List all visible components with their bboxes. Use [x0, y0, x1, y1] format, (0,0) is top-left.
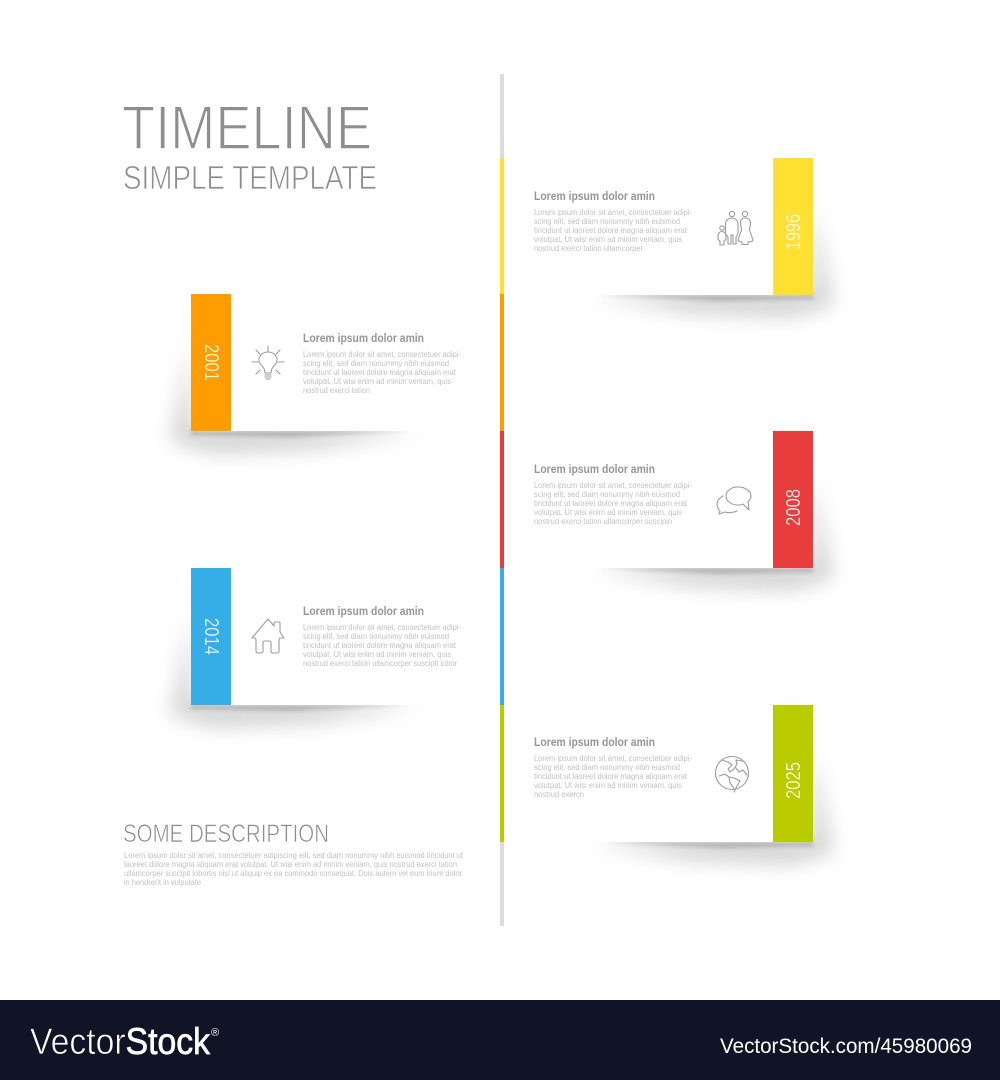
card: 2001: volutpat. Ut wisi enim ad minim veniam, quis: [303, 377, 451, 386]
description block: Lorem ipsum dolor sit amet, consectetuer adipiscing elit, sed diam nonummy nibh euismod tincidunt ut: [124, 851, 464, 860]
title: [122, 94, 377, 196]
card: 2008: Lorem ipsum dolor amin: [534, 462, 655, 476]
description block: laoreet dolore magna aliquam erat volutpat. Ut wisi enim ad minim veniam, quis nostrud exerci tation: [124, 860, 457, 869]
card: 2025: [520, 705, 832, 863]
card: 2014: Lorem ipsum dolor sit amet, consectetuer adipi-: [303, 623, 461, 632]
card: 1996: nostrud exerci tation ullamcorper: [534, 244, 643, 253]
footer url: VectorStock.com/45980069: [720, 1035, 972, 1058]
icon: speech bubbles: [717, 487, 751, 514]
card: 2008: [520, 431, 832, 589]
icon: house: [252, 619, 284, 653]
card: 2008: tincidunt ut laoreet dolore magna aliquam erat: [534, 499, 688, 508]
card: 2001: Lorem ipsum dolor amin: [303, 331, 424, 345]
card: 2014: 2014: [200, 618, 222, 655]
card: 2025: nostrud exercn: [534, 790, 584, 799]
card: 2014: tincidunt ut laoreet dolore magna aliquam erat: [303, 641, 457, 650]
card: 1996: [520, 158, 832, 316]
description block: [123, 820, 464, 887]
footer bar: [0, 1000, 1000, 1080]
card: 1996: Lorem ipsum dolor amin: [534, 189, 655, 203]
title: SIMPLE TEMPLATE: [123, 159, 377, 196]
icon: globe: [716, 756, 748, 792]
description block: ullamcorper suscipit lobortis nisl ut aliquip ex ea commodo consequat. Duis autem vel eum iriure dolor: [124, 869, 462, 878]
card: 2025: tincidunt ut laoreet dolore magna aliquam erat: [534, 772, 688, 781]
registered mark: ®: [211, 1027, 219, 1039]
card: 1996: Lorem ipsum dolor sit amet, consectetuer adipi-: [534, 208, 692, 217]
card: 2008: 2008: [783, 489, 805, 526]
timeline axis: [500, 74, 504, 926]
card: 2008: scing elit, sed diam nonummy nibh euismod: [534, 490, 680, 499]
card: 2025: volutpat. Ut wisi enim ad minim veniam, quis: [534, 781, 682, 790]
card: 2025: scing elit, sed diam nonummy nibh euismod: [534, 763, 680, 772]
card: 2001: nostrud exerci tation: [303, 386, 370, 395]
card: 2008: nostrud exerci tation ullamcorper suscipin: [534, 517, 672, 526]
card: 1996: tincidunt ut laoreet dolore magna aliquam erat: [534, 226, 688, 235]
title: TIMELINE: [122, 94, 372, 163]
icon: light bulb: [252, 346, 284, 379]
card: 1996: scing elit, sed diam nonummy nibh euismod: [534, 217, 680, 226]
card: 2001: scing elit, sed diam nonummy nibh euismod: [303, 359, 449, 368]
card: 2014: [172, 568, 486, 726]
card: 2014: nostrud exerci tation ullamcorper suscipit lobor: [303, 659, 457, 668]
card: 2025: 2025: [783, 762, 805, 799]
card: 2008: volutpat. Ut wisi enim ad minim veniam, quis: [534, 508, 682, 517]
card: 2001: tincidunt ut laoreet dolore magna aliquam erat: [303, 368, 457, 377]
icon: family: [718, 211, 753, 245]
card: 2008: Lorem ipsum dolor sit amet, consectetuer adipi-: [534, 481, 692, 490]
card: 2001: Lorem ipsum dolor sit amet, consectetuer adipi-: [303, 350, 461, 359]
description block: SOME DESCRIPTION: [123, 820, 329, 848]
footer logo: VectorStock: [30, 1021, 210, 1062]
card: 2025: Lorem ipsum dolor sit amet, consectetuer adipi-: [534, 754, 692, 763]
card: 2014: Lorem ipsum dolor amin: [303, 604, 424, 618]
description block: in hendrerit in vulputate: [124, 878, 202, 887]
card: 2001: [172, 294, 486, 452]
card: 2001: 2001: [200, 344, 222, 381]
card: 2014: volutpat. Ut wisi enim ad minim veniam, quis: [303, 650, 451, 659]
card: 1996: volutpat. Ut wisi enim ad minim veniam, quis: [534, 235, 682, 244]
card: 1996: 1996: [783, 214, 805, 250]
card: 2014: scing elit, sed diam nonummy nibh euismod: [303, 632, 449, 641]
card: 2025: Lorem ipsum dolor amin: [534, 735, 655, 749]
